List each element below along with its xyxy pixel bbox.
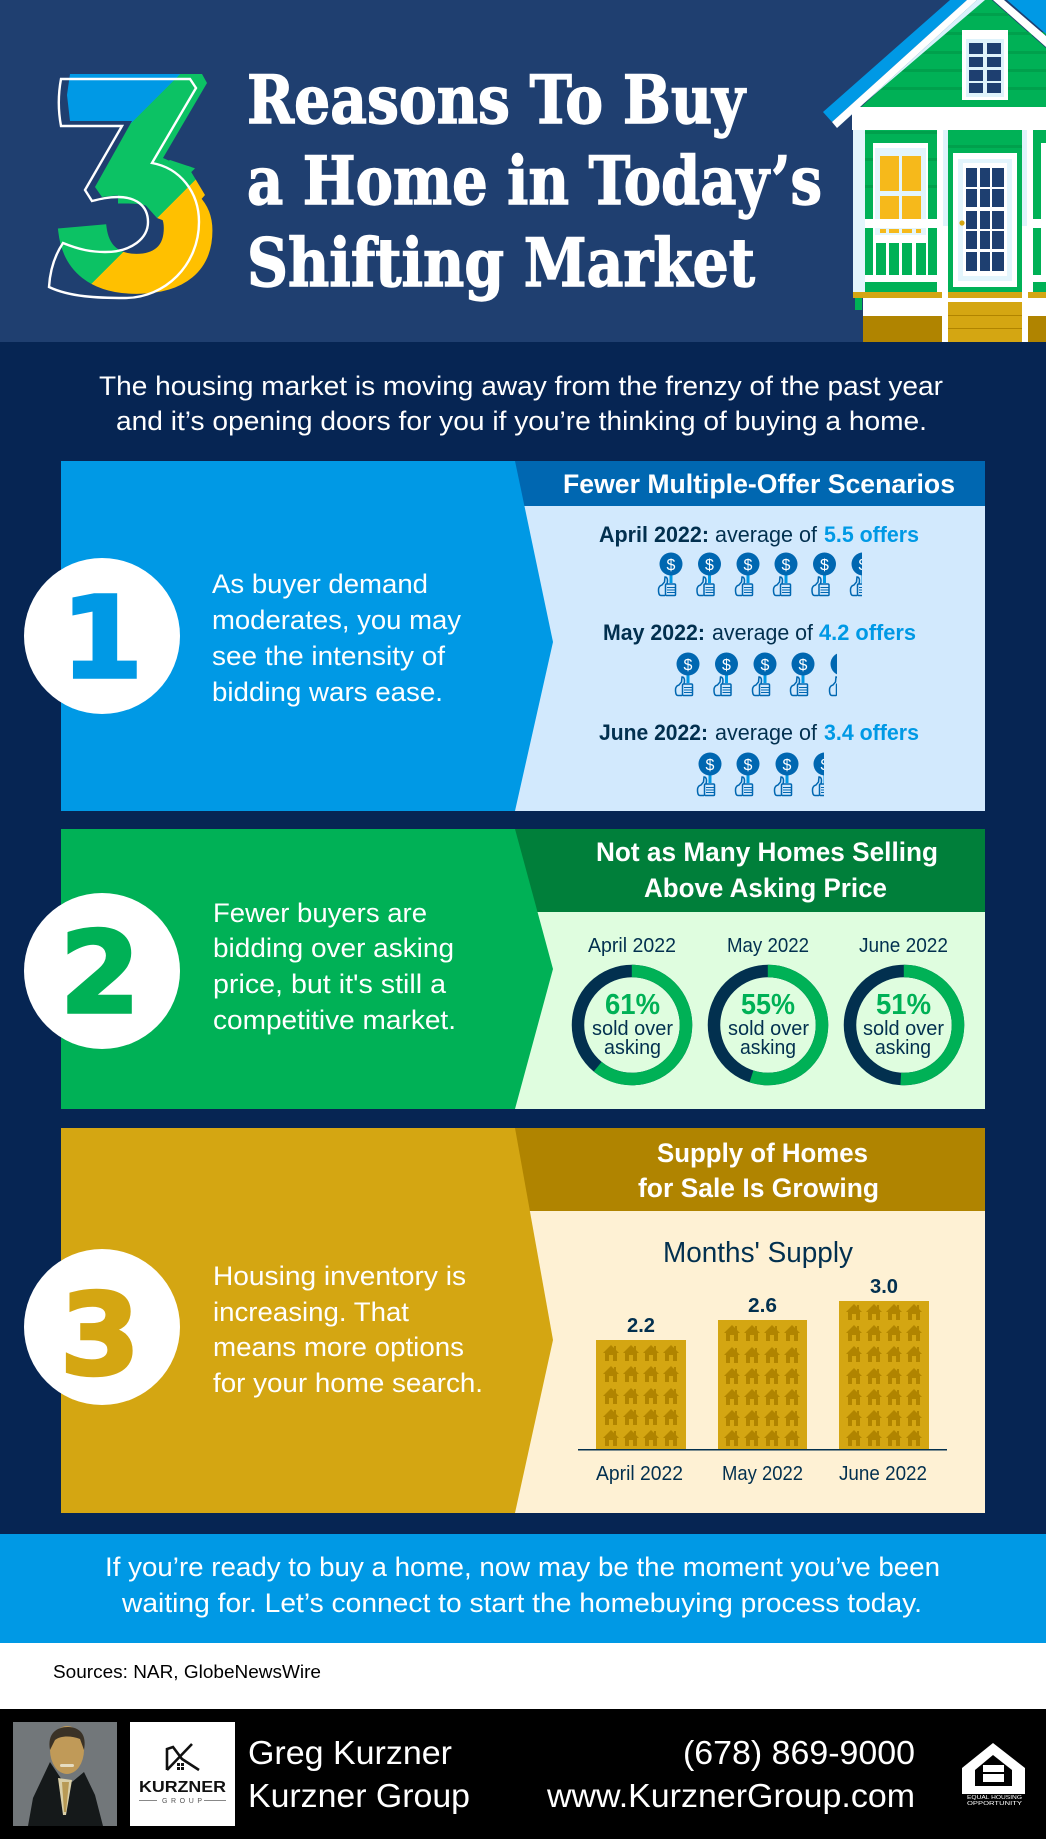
donut June 51%	[850, 935, 958, 1079]
bar May 2.6	[718, 1295, 807, 1485]
front door	[953, 153, 1017, 287]
logo mark	[167, 1744, 199, 1770]
donut May 55%	[714, 935, 822, 1079]
agent photo	[13, 1722, 117, 1826]
panel 2 description: price, but it's still a	[213, 969, 447, 999]
bar June 3.0	[839, 1276, 929, 1485]
intro text	[99, 371, 943, 436]
intro text: and it’s opening doors for you if you’re thinking of buying a home.	[116, 406, 927, 436]
April offer icons: $	[820, 557, 829, 574]
May offer icons: $	[722, 657, 731, 674]
panel 3 description: means more options	[213, 1332, 464, 1362]
April offer icons: $	[667, 557, 676, 574]
June offer icons: $	[706, 757, 715, 774]
agent name: Kurzner Group	[248, 1777, 470, 1814]
equal housing logo	[962, 1743, 1025, 1807]
May offer icons: $	[761, 657, 770, 674]
panel 2 description: competitive market.	[213, 1005, 456, 1035]
May offers line	[603, 620, 916, 645]
footer	[0, 1709, 1046, 1839]
sources band	[0, 1643, 1046, 1709]
panel 1 description: see the intensity of	[212, 641, 446, 671]
roof and gable	[860, 0, 1046, 108]
numeral 3 upper bar	[67, 74, 207, 226]
chart title: Months' Supply	[663, 1237, 853, 1269]
number badge 1: 1	[61, 574, 143, 704]
donut May 55%: asking	[740, 1037, 796, 1059]
panel 3 heading: Supply of Homes	[657, 1138, 868, 1168]
contact details	[546, 1734, 915, 1814]
panel 2 heading: Above Asking Price	[644, 873, 887, 903]
contact details: (678) 869-9000	[683, 1734, 915, 1771]
title	[247, 61, 822, 302]
number badge 1	[24, 558, 180, 714]
call to action banner	[0, 1534, 1046, 1643]
bar chart	[578, 1276, 947, 1485]
agent name	[248, 1734, 470, 1814]
porch walls	[865, 130, 937, 292]
panel 2 heading: Not as Many Homes Selling	[596, 837, 938, 867]
donut May 55%: sold over	[728, 1018, 809, 1040]
porch balusters	[873, 235, 928, 275]
call to action banner: waiting for. Let’s connect to start the homebuying process today.	[121, 1588, 922, 1618]
donut April 61%: 61%	[605, 989, 660, 1021]
bar April 2.2: April 2022	[596, 1463, 683, 1485]
May offer icons: $	[799, 657, 808, 674]
April offers line: average of	[715, 522, 818, 547]
June offers line: 3.4 offers	[824, 720, 919, 745]
April offer icons	[658, 552, 874, 596]
donut May 55%: 55%	[741, 989, 795, 1021]
April offer icons: $	[744, 557, 753, 574]
April offers line	[599, 522, 919, 547]
May offer icons	[676, 652, 854, 696]
April offers line: April 2022:	[599, 522, 709, 547]
donut June 51%: sold over	[863, 1018, 944, 1040]
panel 1 heading: Fewer Multiple-Offer Scenarios	[563, 469, 955, 499]
panel 3 heading: for Sale Is Growing	[638, 1173, 879, 1203]
panel 2 description	[213, 898, 456, 1035]
panel 2 description: bidding over asking	[213, 933, 454, 963]
May offers line: May 2022:	[603, 620, 705, 645]
April offer icons: $	[705, 557, 714, 574]
June offers line: average of	[715, 720, 818, 745]
agent name: Greg Kurzner	[248, 1734, 452, 1771]
bar June 3.0: June 2022	[839, 1463, 927, 1485]
numeral 3 glyph bowl: 3	[55, 19, 220, 350]
bar May 2.6: May 2022	[722, 1463, 803, 1485]
bar April 2.2: 2.2	[627, 1315, 655, 1337]
panel 1 description: As buyer demand	[212, 569, 428, 599]
fascia and columns	[852, 107, 1046, 130]
gable window	[962, 30, 1008, 100]
equal housing logo: EQUAL HOUSING	[967, 1795, 1022, 1801]
panel 3 description: increasing. That	[213, 1297, 409, 1327]
May offers line: average of	[712, 620, 814, 645]
donut June 51%: 51%	[876, 989, 931, 1021]
number badge 3: 3	[60, 1271, 140, 1401]
June offers line	[599, 720, 919, 745]
contact details: www.KurznerGroup.com	[546, 1777, 915, 1814]
donut May 55%: May 2022	[727, 935, 809, 957]
donut June 51%: June 2022	[859, 935, 948, 957]
panel 1 description	[212, 569, 462, 707]
June offer icons	[698, 752, 836, 796]
panel 3 description: for your home search.	[213, 1368, 483, 1398]
panel 2 description: Fewer buyers are	[213, 898, 427, 928]
panel 2: homes selling above asking price	[24, 829, 985, 1109]
April offer icons: $	[859, 557, 868, 574]
call to action banner: If you’re ready to buy a home, now may be the moment you’ve been	[105, 1552, 940, 1582]
company logo: KURZNER	[139, 1779, 226, 1796]
intro text: The housing market is moving away from the frenzy of the past year	[99, 371, 943, 401]
company logo: GROUP	[162, 1798, 202, 1805]
number badge 2	[24, 893, 180, 1049]
panel 3 heading	[638, 1138, 879, 1203]
donut June 51%: asking	[875, 1037, 931, 1059]
numeral 3 white outline	[49, 79, 199, 298]
June offers line: June 2022:	[599, 720, 708, 745]
donut April 61%: sold over	[592, 1018, 673, 1040]
sources band: Sources: NAR, GlobeNewsWire	[53, 1662, 321, 1682]
April offers line: 5.5 offers	[824, 522, 919, 547]
number badge 2: 2	[60, 909, 140, 1039]
bar May 2.6: 2.6	[748, 1295, 777, 1317]
May offer icons: $	[684, 657, 693, 674]
equal housing logo: OPPORTUNITY	[967, 1801, 1022, 1807]
donut April 61%	[578, 935, 686, 1079]
May offers line: 4.2 offers	[819, 620, 916, 645]
panel 1: fewer multiple-offer scenarios	[24, 461, 985, 811]
April offer icons: $	[782, 557, 791, 574]
porch window	[873, 143, 928, 235]
June offer icons: $	[783, 757, 792, 774]
title: a Home in Today’s	[247, 142, 822, 220]
number badge 3	[24, 1249, 180, 1405]
title: Shifting Market	[247, 224, 755, 302]
panel 2 heading	[596, 837, 938, 903]
panel 1 description: moderates, you may	[212, 605, 462, 635]
bar June 3.0: 3.0	[870, 1276, 898, 1298]
June offer icons: $	[744, 757, 753, 774]
panel 1 description: bidding wars ease.	[212, 677, 443, 707]
company logo	[130, 1722, 235, 1826]
donut April 61%: asking	[604, 1037, 661, 1059]
donut April 61%: April 2022	[588, 935, 676, 957]
big numeral 3	[48, 74, 212, 300]
title: Reasons To Buy	[247, 61, 746, 139]
header banner	[0, 0, 1046, 350]
porch deck and foundation	[853, 292, 1046, 298]
panel 3: supply of homes growing	[24, 1128, 985, 1513]
bar April 2.2	[596, 1315, 686, 1485]
panel 3 description: Housing inventory is	[213, 1261, 466, 1291]
house illustration	[823, 0, 1046, 342]
panel 3 description	[213, 1261, 483, 1398]
June offer icons: $	[821, 757, 830, 774]
